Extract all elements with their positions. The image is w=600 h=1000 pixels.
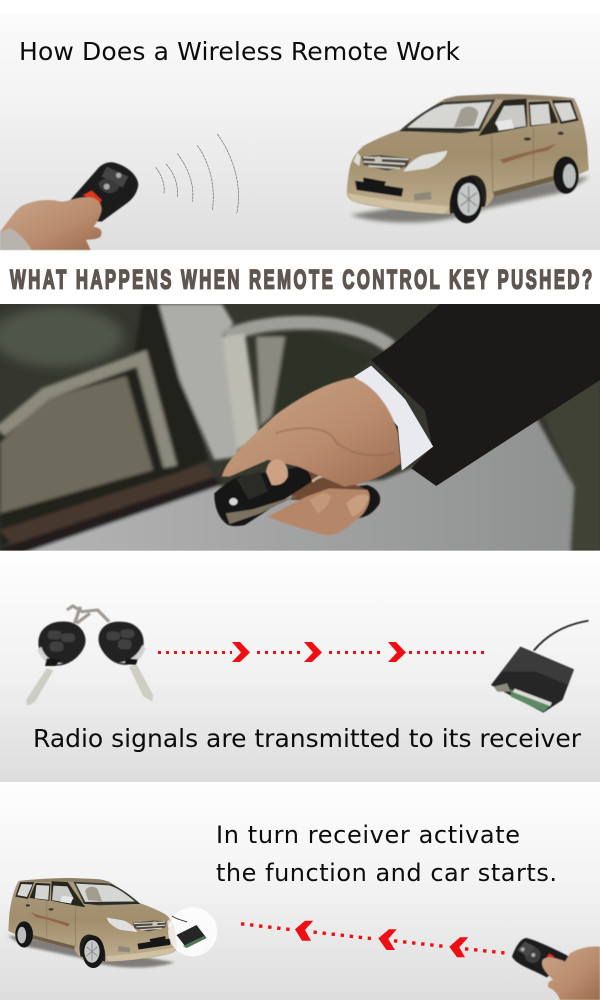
caption: receiver activates: the function and car starts. [216,859,557,887]
panel: receiver activates car [0,782,600,1000]
heading: what happens: WHAT HAPPENS WHEN REMOTE CONTROL KEY PUSHED? [10,264,592,295]
icon: hand holding remote [0,162,138,250]
panel: wireless remote intro [0,14,600,250]
arrow: signal going right [158,642,488,662]
title: How Does a Wireless Remote Work [19,37,461,66]
caption: radio signals: Radio signals are transmitted to its receiver [33,724,582,753]
icon: receiver module [491,621,589,713]
illustration: silver car [347,94,590,223]
caption: receiver activates: In turn receiver activate [216,821,520,849]
icon: receiver in white circle [168,907,217,956]
icon: car keys [26,606,153,706]
icon: hand holding remote [512,938,600,1000]
arrow: signal going left [241,921,504,957]
illustration: car mirrored [7,878,177,968]
photo: hand pressing key fob beside car [0,304,600,553]
panel: radio signals [0,552,600,782]
icon: signal waves [156,134,239,213]
caption: receiver activates [216,821,557,887]
